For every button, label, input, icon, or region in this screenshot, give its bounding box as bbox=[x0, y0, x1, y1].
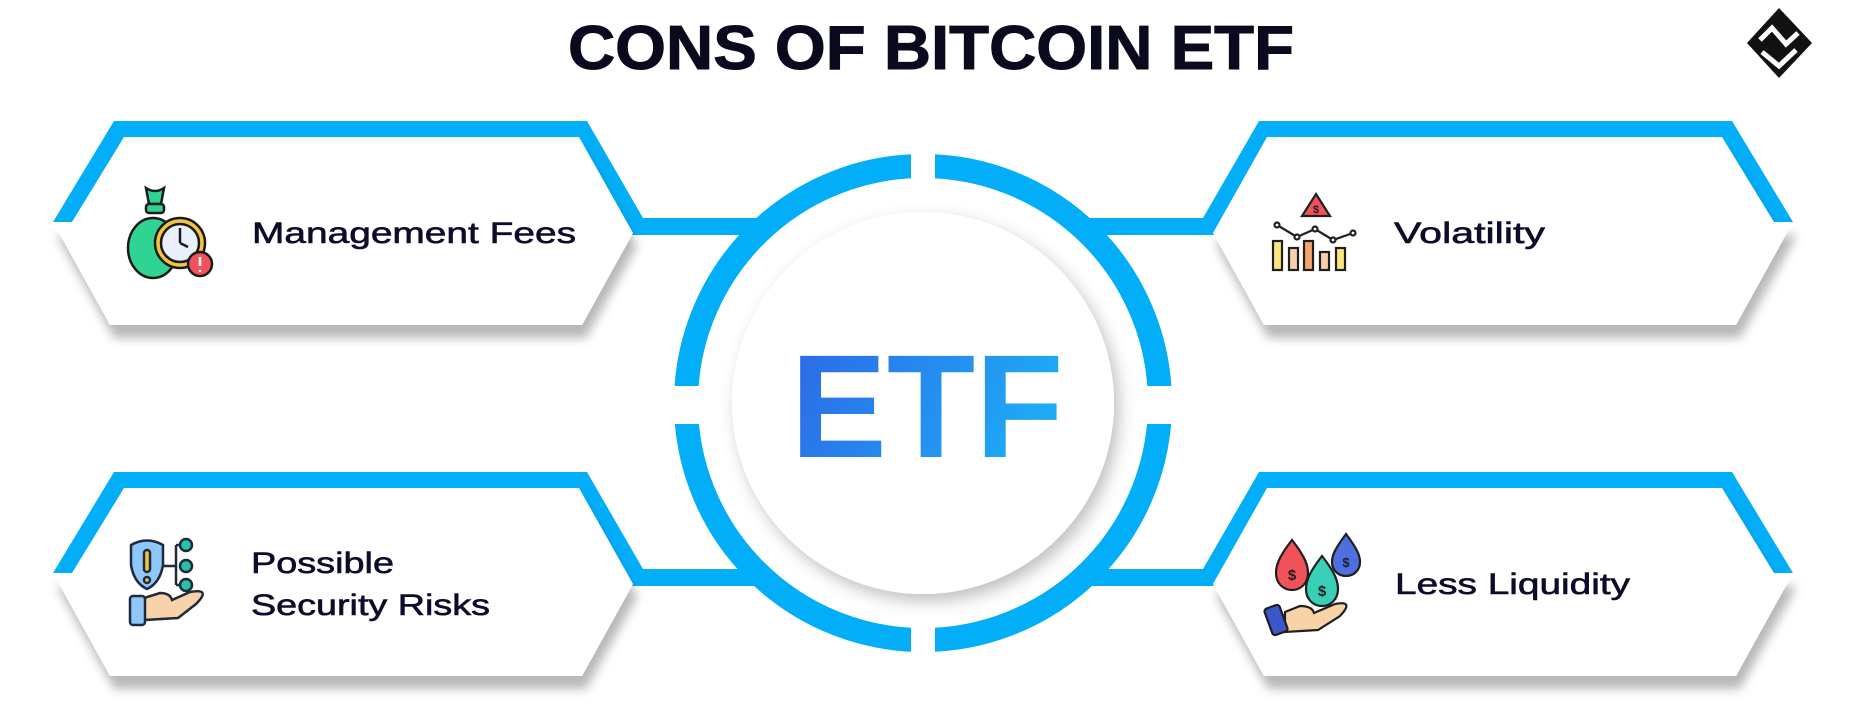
ring bbox=[665, 150, 1181, 656]
panel: less liquidity: $ bbox=[1318, 583, 1327, 600]
panel: less liquidity bbox=[1081, 472, 1793, 676]
center disk ETF: ETF bbox=[790, 325, 1064, 489]
icon: volatility chart bbox=[1273, 194, 1356, 270]
text: Management Fees bbox=[252, 217, 576, 250]
center disk ETF bbox=[732, 212, 1114, 594]
panel: less liquidity: $ bbox=[1288, 567, 1297, 584]
icon: liquidity drops hand bbox=[1264, 534, 1360, 636]
text: Possible bbox=[251, 547, 394, 580]
panel: possible security risks: Security Risks bbox=[251, 589, 490, 622]
panel: volatility: $ bbox=[1313, 204, 1319, 216]
panel: volatility bbox=[1081, 121, 1793, 325]
panel: possible security risks bbox=[53, 472, 765, 676]
panel: management fees bbox=[53, 121, 765, 325]
text: Volatility bbox=[1394, 217, 1545, 250]
panel: less liquidity: $ bbox=[1342, 555, 1350, 570]
icon: money bag clock bbox=[128, 188, 212, 278]
logo bbox=[1747, 8, 1812, 78]
icon: shield hand bbox=[130, 539, 203, 625]
text: Less Liquidity bbox=[1395, 568, 1630, 601]
title: CONS OF BITCOIN ETF bbox=[568, 14, 1294, 83]
